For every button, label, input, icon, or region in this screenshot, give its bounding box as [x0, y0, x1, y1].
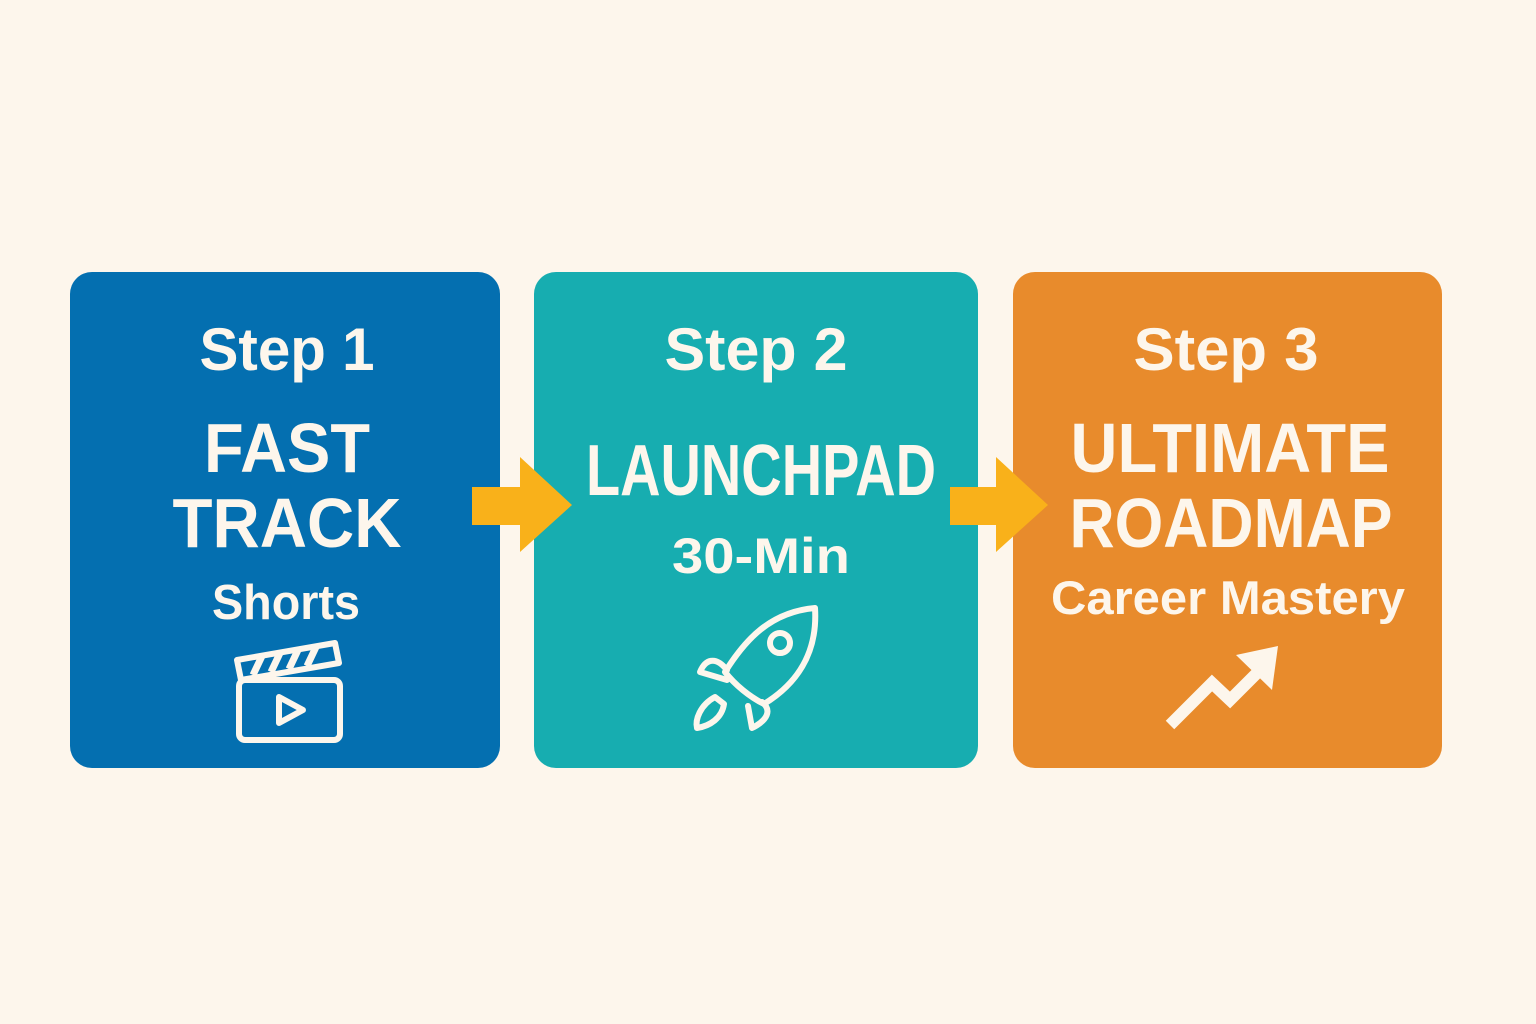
- heading: Step 3: Step 3: [1134, 316, 1318, 383]
- heading: Step 2: Step 2: [664, 316, 848, 383]
- title: ULTIMATE ROADMAP: ULTIMATE: [1070, 409, 1390, 487]
- title: FAST TRACK: [172, 409, 402, 562]
- title: FAST TRACK: FAST: [204, 409, 370, 487]
- subtitle: Career Mastery: Career Mastery: [1051, 571, 1405, 624]
- icon: clapperboard: [237, 643, 340, 740]
- panel: step 2: [534, 272, 978, 768]
- icon: trend arrow: [1170, 646, 1278, 725]
- arrow: step 2 to 3: [950, 457, 1048, 552]
- title: FAST TRACK: TRACK: [172, 484, 402, 562]
- heading: Step 1: Step 1: [200, 316, 374, 383]
- subtitle: Shorts: Shorts: [212, 576, 360, 630]
- panel: step 1: [70, 272, 500, 768]
- icon: rocket: [697, 608, 815, 728]
- subtitle: 30-Min: 30-Min: [672, 528, 850, 584]
- panel: step 3: [1013, 272, 1442, 768]
- arrow: step 1 to 2: [472, 457, 572, 552]
- title: ULTIMATE ROADMAP: [1070, 409, 1392, 562]
- title: ULTIMATE ROADMAP: ROADMAP: [1070, 484, 1392, 562]
- title: LAUNCHPAD: LAUNCHPAD: [586, 431, 936, 511]
